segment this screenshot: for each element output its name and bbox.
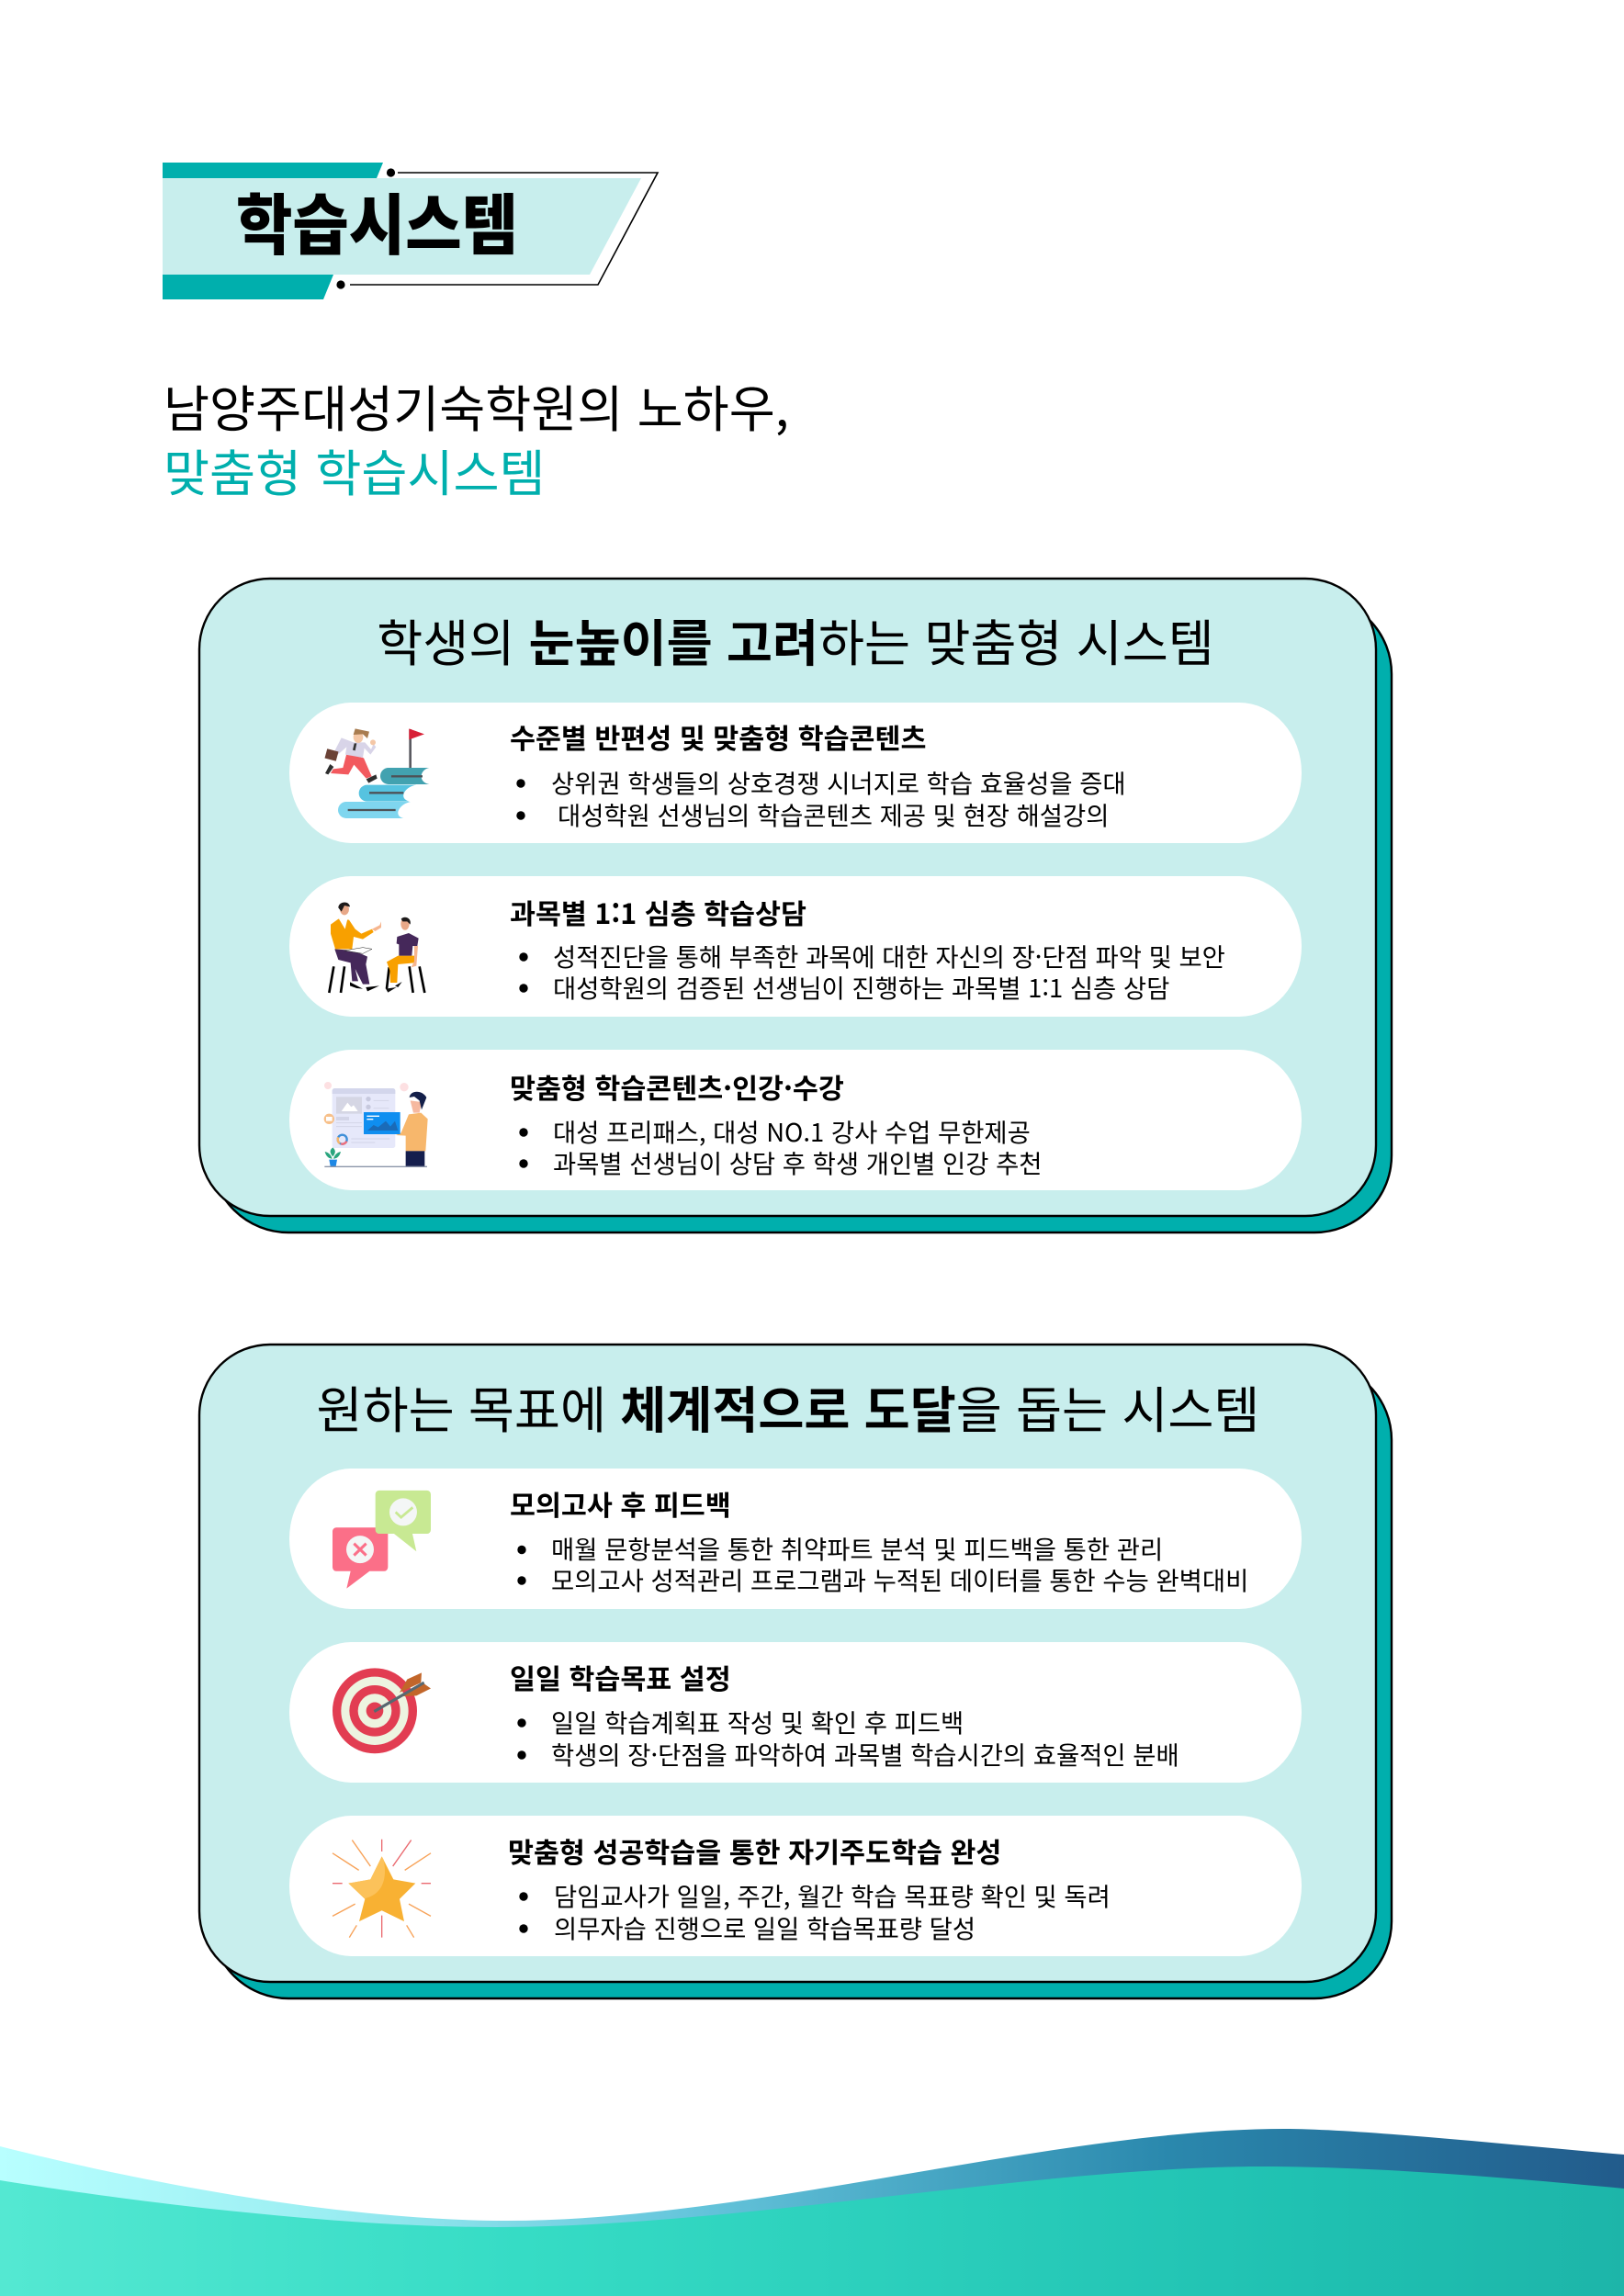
item 3 text: 과목별 선생님이 상담 후 학생 개인별 인강 추천 [553,1143,1042,1180]
item 4 text: 모의고사 성적관리 프로그램과 누적된 데이터를 통한 수능 완벽대비 [551,1560,1248,1597]
item 5 text [510,1657,1179,1772]
footer wave [0,2129,1624,2296]
item 6 text [508,1830,1111,1945]
item 4 text: 매월 문항분석을 통한 취약파트 분석 및 피드백을 통한 관리 [551,1529,1163,1566]
subtitle: 맞춤형 학습시스템 [164,433,546,506]
icon: star [333,1840,431,1938]
icon: teacher and student [329,903,424,993]
panel: 체계적 목표 시스템 [199,1345,1392,1998]
panel heading: 원하는 목표에 체계적으로 도달을 돕는 시스템 [317,1370,1259,1443]
item 3 text: 대성 프리패스, 대성 NO.1 강사 수업 무한제공 [553,1112,1031,1149]
item 6 text: 맞춤형 성공학습을 통한 자기주도학습 완성 [508,1830,1001,1871]
item: 학습목표 설정 [289,1642,1302,1783]
icon: speech bubbles [333,1491,431,1589]
subtitle [164,369,789,506]
item 2 text: 과목별 1:1 심층 학습상담 [510,892,806,932]
item 6 text: 의무자습 진행으로 일일 학습목표량 달성 [554,1908,976,1945]
item 1 text: 대성학원 선생님의 학습콘텐츠 제공 및 현장 해설강의 [558,795,1109,832]
item 5 text: 학생의 장·단점을 파악하여 과목별 학습시간의 효율적인 분배 [551,1735,1179,1772]
item 1 text: 상위권 학생들의 상호경쟁 시너지로 학습 효율성을 증대 [551,763,1126,800]
item 6 text: 담임교사가 일일, 주간, 월간 학습 목표량 확인 및 독려 [554,1876,1111,1913]
item 2 text [510,892,1225,1005]
item: 인강 수강 [289,1050,1302,1190]
item 1 text [510,716,1126,832]
item 2 text: 대성학원의 검증된 선생님이 진행하는 과목별 1:1 심층 상담 [553,968,1169,1005]
item 1 text: 수준별 반편성 및 맞춤형 학습콘텐츠 [510,716,926,757]
item 4 text: 모의고사 후 피드백 [510,1483,731,1524]
icon: target with arrow [333,1668,431,1753]
icon: online content [324,1082,428,1167]
subtitle: 남양주대성기숙학원의 노하우, [164,369,789,442]
panel: 눈높이 시스템 [199,579,1392,1232]
item 5 text: 일일 학습계획표 작성 및 확인 후 피드백 [551,1703,964,1739]
item 5 text: 일일 학습목표 설정 [510,1657,731,1697]
item: 과목별 심층 상담 [289,876,1302,1017]
item: 수준별 반편성 [289,703,1302,843]
item 2 text: 성적진단을 통해 부족한 과목에 대한 자신의 장·단점 파악 및 보안 [553,937,1225,974]
item 4 text [510,1483,1248,1597]
item 3 text [510,1066,1042,1180]
header banner [163,163,658,299]
item: 자기주도학습 [289,1816,1302,1956]
item: 모의고사 피드백 [289,1469,1302,1609]
panel heading: 학생의 눈높이를 고려하는 맞춤형 시스템 [377,603,1214,676]
item 3 text: 맞춤형 학습콘텐츠·인강·수강 [510,1066,844,1107]
icon: runner on books [325,728,429,818]
banner title: 학습시스템 [236,172,518,268]
